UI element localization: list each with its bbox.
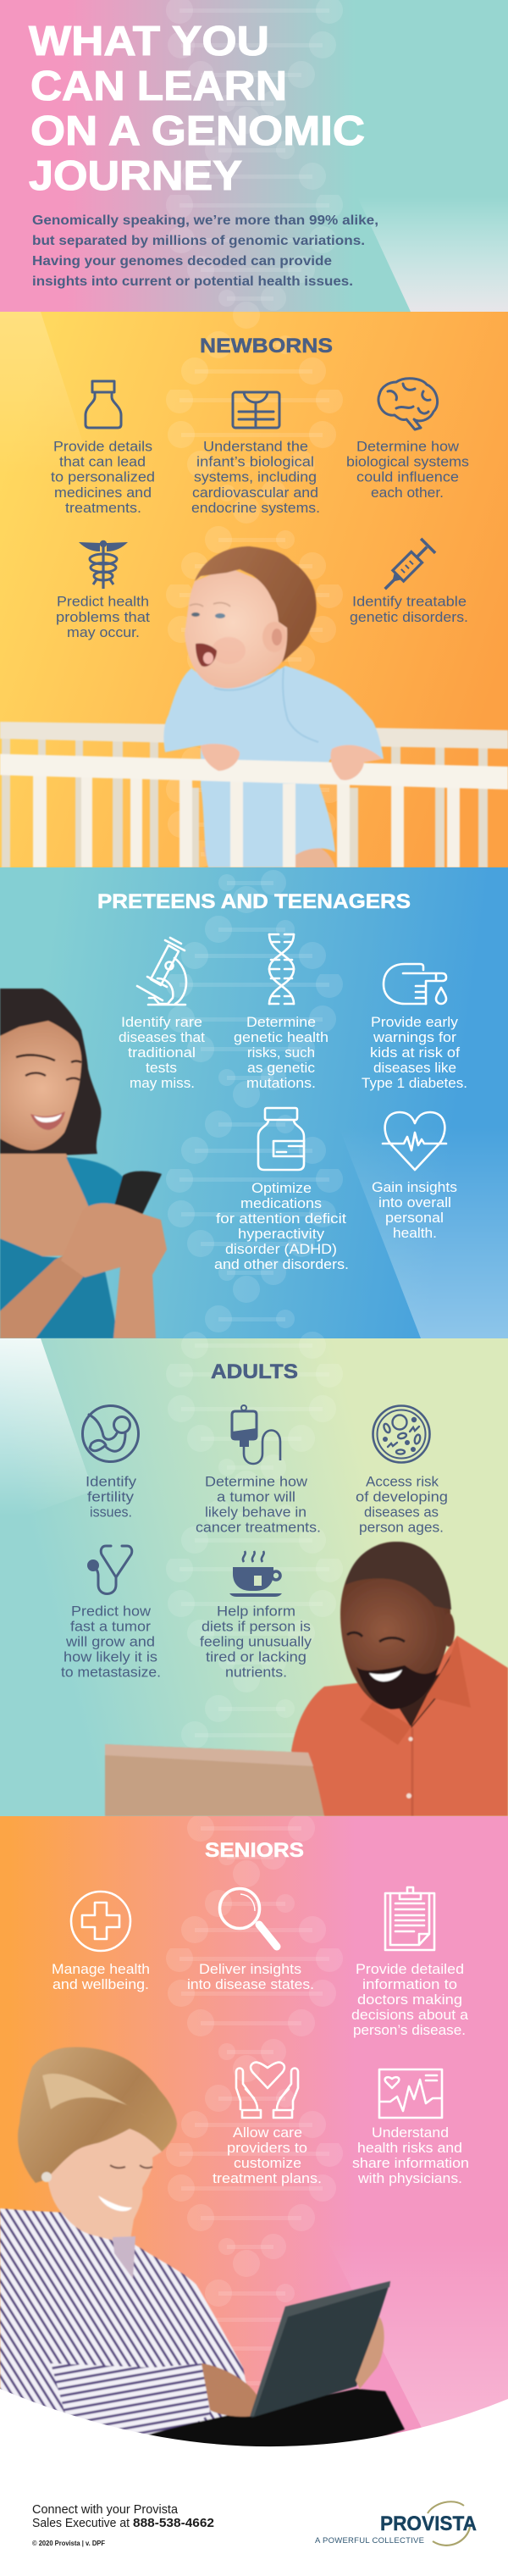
icon: petri dish	[373, 1406, 430, 1462]
icon: hands holding heart	[236, 2063, 298, 2118]
text: systems influence: could influence	[356, 470, 459, 485]
text: informing diets	[200, 1604, 312, 1681]
text: rare diseases: Identify rare	[121, 1015, 202, 1030]
text: rare diseases: tests	[146, 1061, 177, 1076]
text: biological systems: Understand the	[203, 439, 308, 454]
icon: stethoscope	[88, 1546, 132, 1594]
text: biological systems: cardiovascular and	[192, 485, 318, 501]
text: genetic risks	[234, 1015, 329, 1091]
text: doctors' decisions	[351, 1962, 469, 2038]
heading: newborns: NEWBORNS	[200, 335, 333, 357]
text: biological systems: systems, including	[194, 470, 317, 485]
text: disease insights	[187, 1962, 314, 1992]
text: informing diets: nutrients.	[225, 1665, 287, 1681]
text: ageing risk: of developing	[356, 1489, 448, 1504]
text: tumor growth: will grow and	[65, 1635, 155, 1650]
panel: hero introduction	[0, 0, 508, 312]
text: personalized medicines: that can lead	[59, 454, 146, 469]
text: customized treatment: customize	[234, 2156, 301, 2171]
text: personalized medicines: medicines and	[54, 485, 152, 501]
panel: adults	[0, 1338, 508, 1816]
crib back rail and slats	[0, 722, 508, 867]
text: predict health problems	[56, 595, 150, 640]
text: personalized medicines: Provide details	[53, 439, 152, 454]
heading: seniors: SENIORS	[205, 1839, 304, 1862]
intro paragraph: Genomically speaking, we’re more than 99% alike,	[32, 213, 378, 228]
title: ON A GENOMIC	[30, 108, 365, 154]
panel: footer	[32, 2501, 477, 2547]
text: customized treatment: Allow care	[233, 2125, 302, 2141]
text: early warnings	[362, 1015, 467, 1091]
text: predict health problems: problems that	[56, 610, 150, 625]
icon: heart monitor	[379, 2069, 442, 2118]
text: early warnings: diseases like	[373, 1061, 456, 1076]
icon: iv bag	[232, 1405, 280, 1464]
text: fertility issues: fertility	[87, 1489, 135, 1504]
text: systems influence: each other.	[371, 485, 444, 501]
text: treatable disorders	[350, 595, 468, 625]
text: disease insights: Deliver insights	[199, 1962, 301, 1977]
icon: chest x-ray	[233, 392, 279, 428]
text: systems influence	[346, 439, 469, 501]
text: physician sharing	[352, 2125, 469, 2186]
baby head	[185, 546, 317, 689]
photo: man with laptop	[105, 1542, 508, 1816]
text: personalized medicines	[51, 439, 155, 516]
text: customized treatment: treatment plans.	[213, 2171, 322, 2186]
text: tumor behaviour: cancer treatments.	[196, 1520, 321, 1535]
logo: provista: PROVISTA	[380, 2512, 477, 2535]
title: CAN LEARN	[30, 64, 287, 109]
text: ageing risk: person ages.	[359, 1520, 444, 1535]
text: tumor behaviour	[196, 1474, 321, 1535]
text: early warnings: Provide early	[371, 1015, 459, 1030]
intro paragraph	[32, 213, 378, 289]
text: tumor growth: how likely it is	[64, 1650, 157, 1665]
title: JOURNEY	[29, 153, 242, 199]
intro paragraph: insights into current or potential health issues.	[32, 274, 353, 289]
icon: magnifying glass	[220, 1889, 277, 1947]
text: customized treatment: providers to	[227, 2141, 307, 2156]
baby body	[163, 666, 384, 867]
text: biological systems: endocrine systems.	[191, 501, 320, 516]
text: genetic risks: genetic health	[234, 1030, 329, 1045]
intro paragraph: Having your genomes decoded can provide	[32, 254, 332, 269]
text: physician sharing: health risks and	[357, 2141, 462, 2156]
text: overall health: personal	[385, 1210, 444, 1226]
text: informing diets: tired or lacking	[206, 1650, 306, 1665]
text: tumor growth: fast a tumor	[70, 1620, 152, 1635]
heading: preteens and teenagers: PRETEENS AND TEENAGERS	[97, 890, 411, 913]
text: informing diets: diets if person is	[202, 1620, 311, 1635]
text: overall health: Gain insights	[372, 1180, 457, 1195]
text: doctors' decisions: decisions about a	[351, 2008, 469, 2023]
text: treatable disorders: Identify treatable	[352, 595, 467, 610]
text: personalized medicines: treatments.	[65, 501, 141, 516]
text: optimize medications: and other disorders.	[214, 1257, 349, 1272]
text: optimize medications: disorder (ADHD)	[225, 1242, 337, 1257]
text: early warnings: warnings for	[373, 1030, 457, 1045]
text: fertility issues: issues.	[90, 1504, 132, 1520]
text: tumor growth	[61, 1604, 161, 1681]
text: overall health: health.	[393, 1226, 437, 1241]
baby hands	[201, 744, 383, 780]
icon: medical cross in circle	[71, 1892, 130, 1951]
icon: fetus	[83, 1406, 139, 1462]
contact text	[32, 2503, 214, 2530]
icon: caduceus	[79, 540, 128, 589]
text: genetic risks: risks, such	[247, 1045, 315, 1061]
text: rare diseases: diseases that	[119, 1030, 205, 1045]
text: informing diets: feeling unusually	[200, 1635, 312, 1650]
crib front rail and slats	[0, 754, 508, 867]
panel: seniors	[0, 1816, 508, 2499]
text: tumor behaviour: a tumor will	[217, 1489, 295, 1504]
text: rare diseases	[119, 1015, 205, 1091]
contact text: 888-538-4662	[133, 2517, 214, 2530]
text: optimize medications	[214, 1181, 349, 1272]
text: rare diseases: traditional	[128, 1045, 196, 1061]
text: physician sharing: with physicians.	[357, 2171, 462, 2186]
icon: syringe	[378, 539, 435, 596]
text: ageing risk: Access risk	[366, 1474, 439, 1489]
icon: tea cup	[229, 1551, 282, 1597]
text: treatable disorders: genetic disorders.	[350, 610, 468, 625]
text: manage health: Manage health	[52, 1962, 150, 1977]
text: informing diets: Help inform	[217, 1604, 295, 1620]
text: biological systems: infant’s biological	[196, 454, 314, 469]
text: manage health	[52, 1962, 150, 1992]
text: biological systems	[191, 439, 320, 516]
text: manage health: and wellbeing.	[52, 1977, 149, 1992]
text: doctors' decisions: Provide detailed	[356, 1962, 464, 1977]
panel: newborns	[0, 312, 508, 867]
text: ageing risk	[356, 1474, 448, 1535]
text: doctors' decisions: information to	[362, 1977, 457, 1992]
text: genetic risks: as genetic	[247, 1061, 315, 1076]
text: predict health problems: may occur.	[67, 625, 140, 640]
text: fertility issues	[86, 1474, 137, 1520]
contact text: Sales Executive at	[32, 2517, 130, 2530]
text: early warnings: Type 1 diabetes.	[362, 1076, 467, 1091]
text: doctors' decisions: person’s disease.	[353, 2023, 466, 2038]
text: tumor behaviour: Determine how	[205, 1474, 307, 1489]
text: early warnings: kids at risk of	[370, 1045, 460, 1061]
text: physician sharing: share information	[352, 2156, 469, 2171]
text: genetic risks: Determine	[246, 1015, 316, 1030]
icon: microscope	[137, 938, 186, 1005]
text: doctors' decisions: doctors making	[357, 1992, 462, 2008]
text: rare diseases: may miss.	[130, 1076, 195, 1091]
photo: teen with phone	[0, 989, 167, 1338]
icon: heart with pulse	[383, 1112, 446, 1170]
text: optimize medications: Optimize	[251, 1181, 312, 1196]
text: physician sharing: Understand	[372, 2125, 449, 2141]
text: customized treatment	[213, 2125, 322, 2186]
text: tumor behaviour: likely behave in	[205, 1504, 306, 1520]
text: systems influence: biological systems	[346, 454, 469, 469]
icon: medication bottle	[258, 1108, 304, 1170]
logo: provista: A POWERFUL COLLECTIVE	[315, 2536, 424, 2546]
text: genetic risks: mutations.	[246, 1076, 316, 1091]
text: ageing risk: diseases as	[364, 1504, 439, 1520]
heading: adults: ADULTS	[211, 1360, 298, 1383]
text: disease insights: into disease states.	[187, 1977, 314, 1992]
contact text: Connect with your Provista	[32, 2503, 179, 2517]
icon: finger with blood drop	[384, 964, 446, 1004]
title: WHAT YOU	[29, 19, 269, 64]
text: optimize medications: medications	[240, 1196, 322, 1211]
text: systems influence: Determine how	[356, 439, 459, 454]
icon: clipboard	[385, 1887, 434, 1950]
icon: dna helix	[269, 934, 294, 1004]
text: overall health: into overall	[378, 1195, 451, 1210]
intro paragraph: but separated by millions of genomic variations.	[32, 234, 365, 248]
white curved bottom edge	[0, 2389, 508, 2576]
title	[29, 19, 365, 199]
text: fertility issues: Identify	[86, 1474, 137, 1489]
logo: provista	[315, 2501, 477, 2546]
text: tumor growth: to metastasize.	[61, 1665, 161, 1681]
text: optimize medications: for attention deficit	[216, 1211, 346, 1227]
photo: senior woman with tablet	[0, 2047, 405, 2457]
text: tumor growth: Predict how	[71, 1604, 151, 1620]
copyright: © 2020 Provista | v. DPF	[32, 2540, 105, 2547]
icon: medicine bottle	[86, 381, 121, 428]
text: optimize medications: hyperactivity	[238, 1227, 325, 1242]
text: predict health problems: Predict health	[57, 595, 149, 610]
text: overall health	[372, 1180, 457, 1241]
text: personalized medicines: to personalized	[51, 470, 155, 485]
photo: baby standing in crib	[0, 546, 508, 867]
icon: brain	[378, 379, 438, 429]
panel: preteens and teenagers	[0, 867, 508, 1338]
